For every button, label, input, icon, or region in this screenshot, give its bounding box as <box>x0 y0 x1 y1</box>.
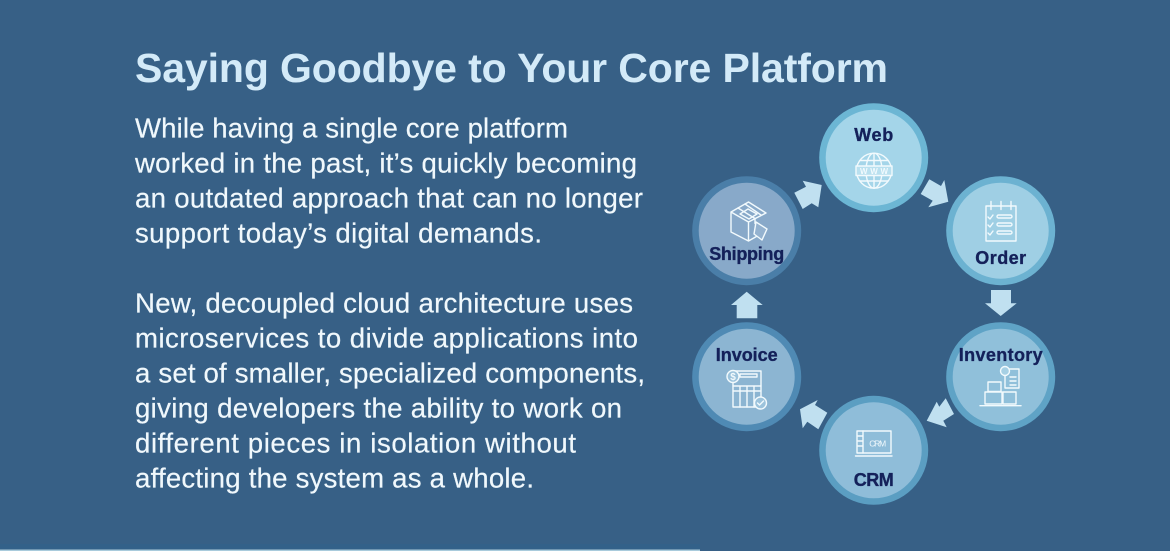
icon: invoice with dollar <box>727 370 766 409</box>
text block: cloud architecture paragraph: giving developers the ability to work on <box>135 392 622 424</box>
node: CRM: CRM <box>869 438 886 448</box>
text block: intro paragraph: worked in the past, it’s quickly becoming <box>134 148 637 178</box>
text block: cloud architecture paragraph: microservices to divide applications into <box>135 322 638 354</box>
text block: intro paragraph: an outdated approach that can no longer <box>135 182 643 214</box>
arrow: CRM to Invoice <box>800 400 827 429</box>
node: Invoice <box>692 322 801 431</box>
icon: boxes with clipboard <box>980 366 1021 406</box>
node: Web: Web <box>854 125 893 145</box>
cycle diagram <box>692 103 1055 505</box>
node: Inventory <box>946 322 1055 431</box>
title: Saying Goodbye to Your Core Platform <box>135 45 888 91</box>
node: Invoice: $ <box>730 372 736 383</box>
icon: checklist notepad <box>986 202 1016 241</box>
text block: cloud architecture paragraph <box>135 288 645 494</box>
arrow: Shipping to Web <box>794 181 822 209</box>
text block: cloud architecture paragraph: affecting the system as a whole. <box>135 462 534 494</box>
node: Invoice: Invoice <box>716 345 778 365</box>
arrow: Web to Order <box>921 179 948 207</box>
node: Order <box>946 176 1055 285</box>
node: Order: Order <box>975 248 1026 268</box>
arrow: Inventory to CRM <box>927 398 954 427</box>
text block: intro paragraph: While having a single core platform <box>135 112 568 144</box>
node: Web: WWW <box>860 167 888 176</box>
node: CRM <box>819 396 928 505</box>
icon: package box <box>731 202 767 241</box>
text block: cloud architecture paragraph: New, decoupled cloud architecture uses <box>135 288 633 318</box>
icon: laptop CRM <box>856 431 892 456</box>
node: Shipping <box>692 176 801 285</box>
node: Inventory: Inventory <box>959 345 1043 365</box>
icon: globe www <box>856 153 892 188</box>
node: Web <box>819 103 928 212</box>
arrow: Invoice to Shipping <box>731 292 763 318</box>
text block: intro paragraph: support today’s digital demands. <box>135 218 542 248</box>
node: Shipping: Shipping <box>709 244 784 264</box>
text block: cloud architecture paragraph: a set of smaller, specialized components, <box>135 358 645 388</box>
node: CRM: CRM <box>854 470 894 490</box>
arrow: Order to Inventory <box>985 290 1017 316</box>
text block: intro paragraph <box>134 112 643 248</box>
text block: cloud architecture paragraph: different pieces in isolation without <box>135 428 576 458</box>
